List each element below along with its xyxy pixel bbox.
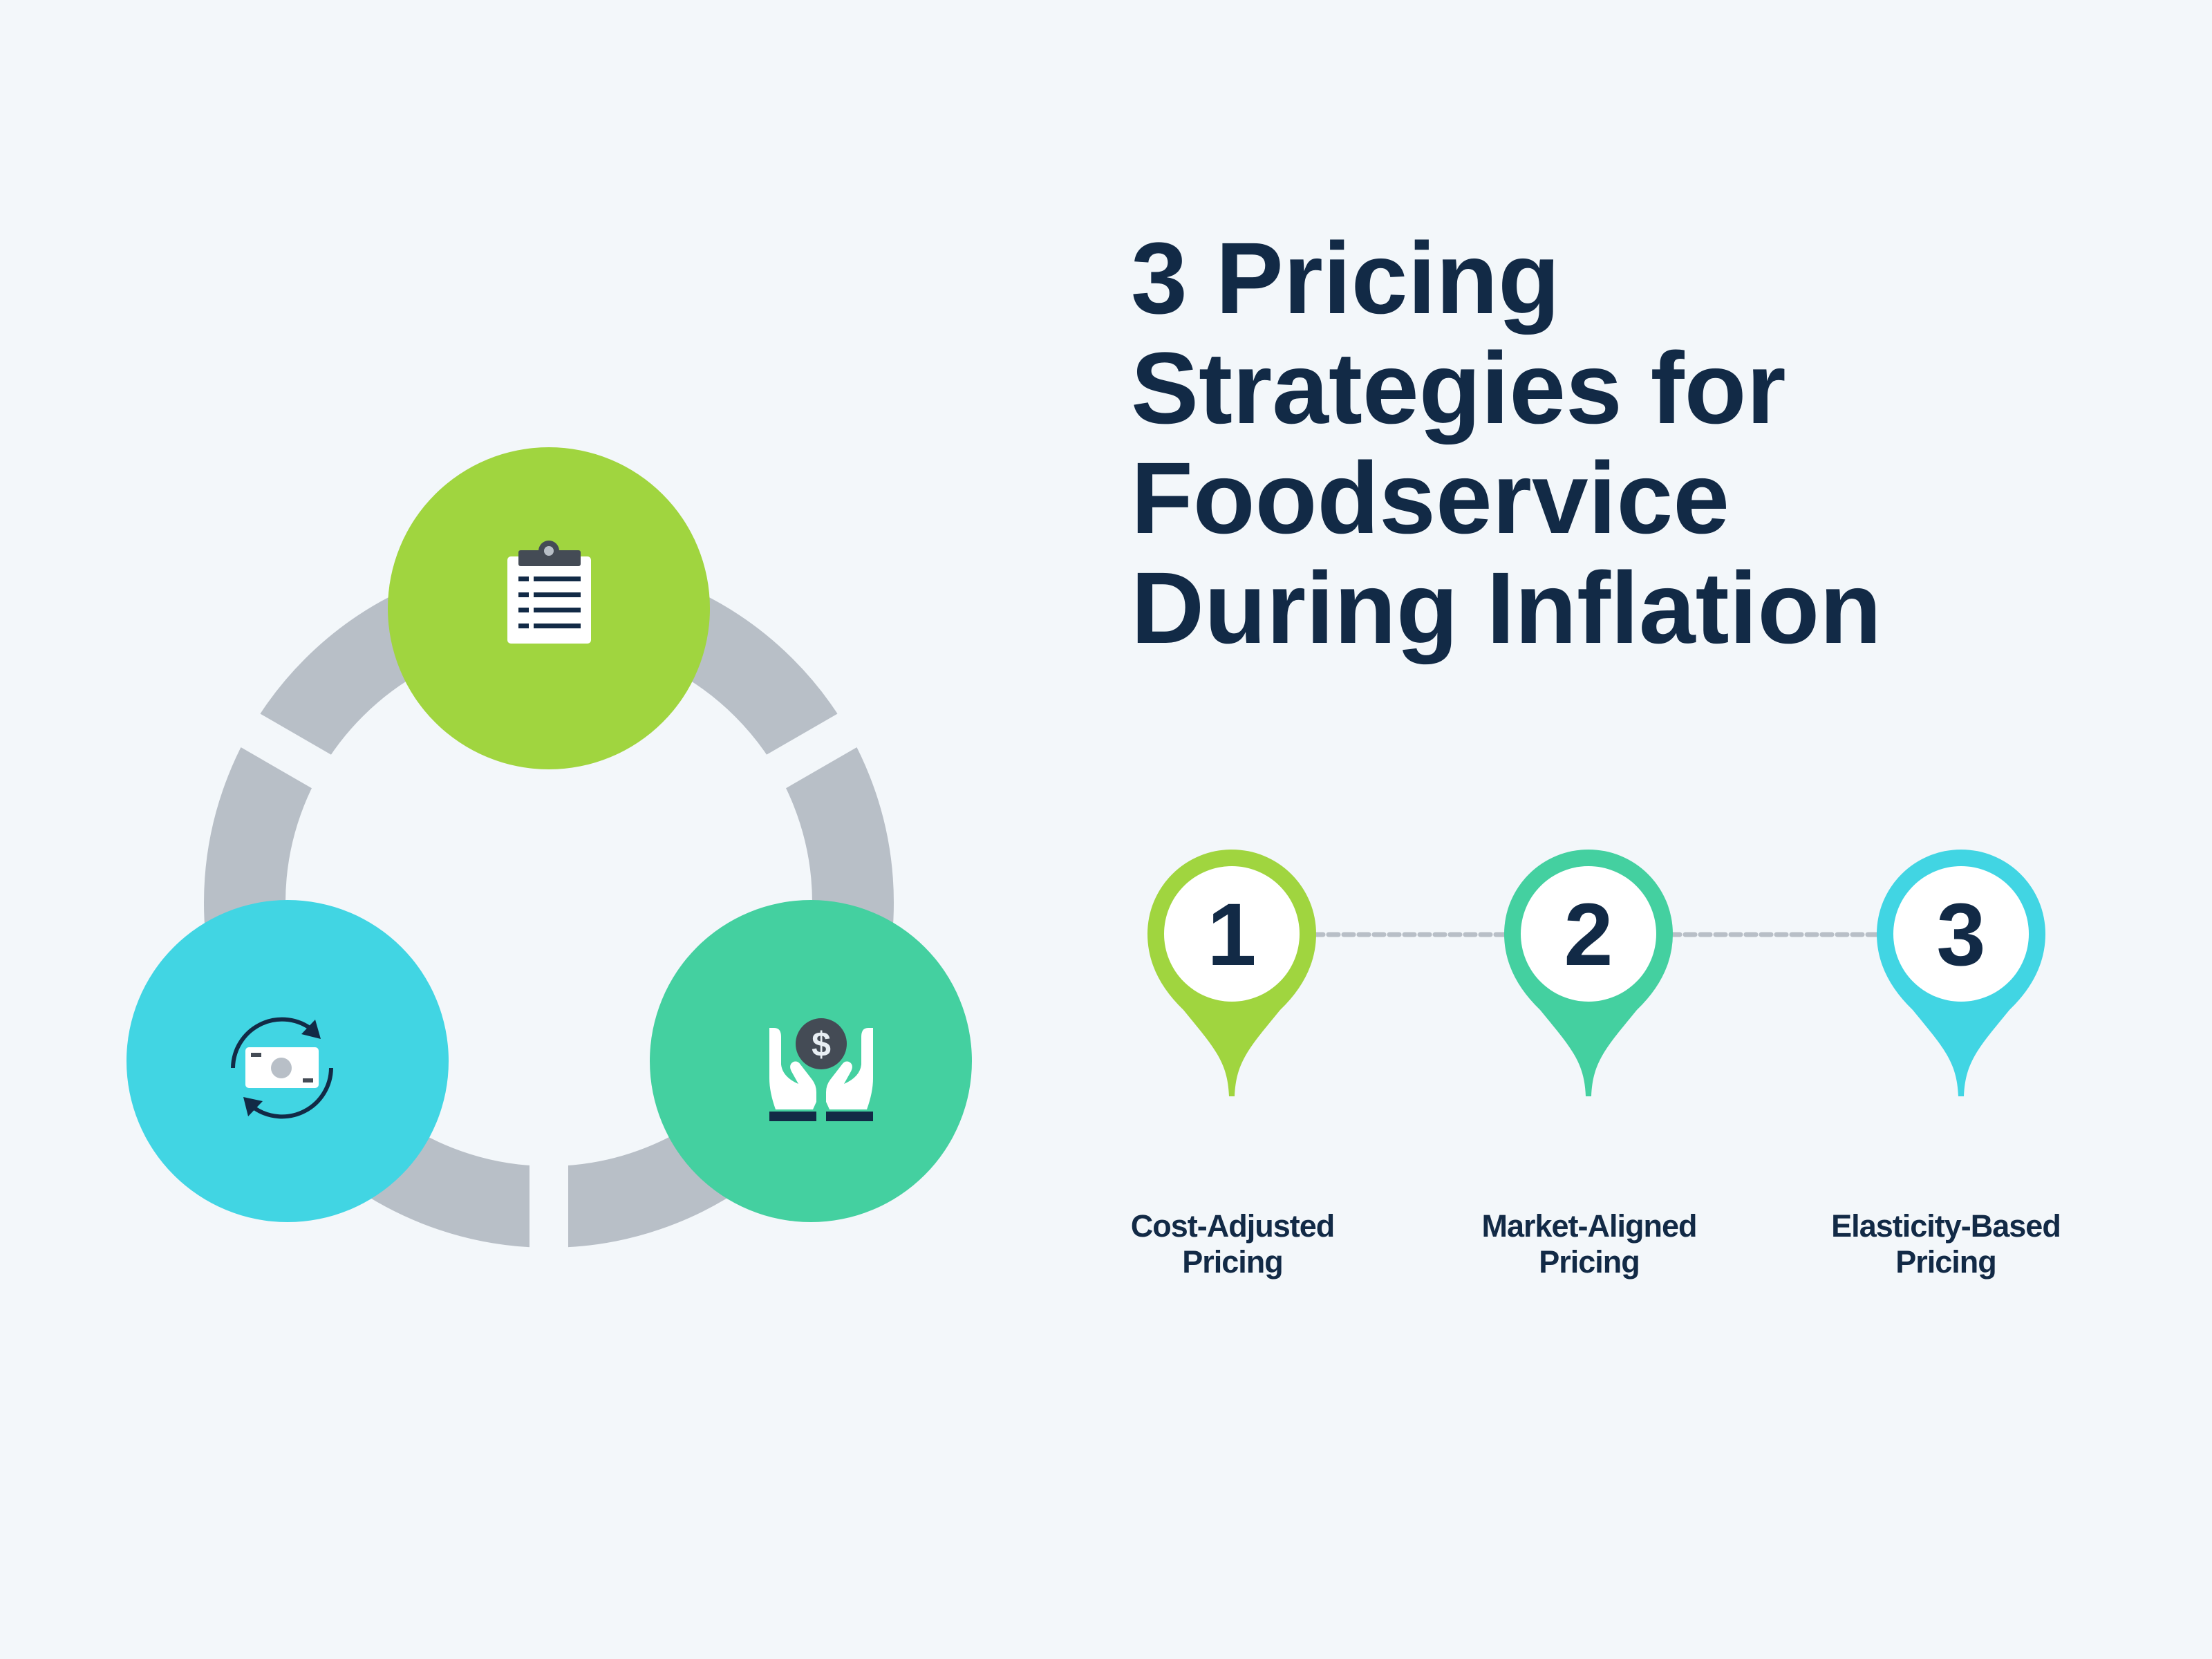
label 2 xyxy=(1481,1208,1697,1280)
label 1: Cost-Adjusted xyxy=(1131,1208,1334,1244)
label 2: Market-Aligned xyxy=(1481,1208,1697,1244)
icon: clipboard xyxy=(507,541,591,644)
pin 1: 1 xyxy=(1207,885,1257,984)
title: During Inflation xyxy=(1131,552,1882,665)
pin 1 xyxy=(1147,850,1316,1096)
title: Foodservice xyxy=(1131,442,1730,555)
dashed connector xyxy=(1313,932,1880,937)
circle: clipboard xyxy=(388,447,710,769)
label 3: Elasticity-Based xyxy=(1831,1208,2061,1244)
title: 3 Pricing xyxy=(1131,222,1560,335)
pin 3 xyxy=(1877,850,2045,1096)
label 2: Pricing xyxy=(1539,1244,1640,1280)
title: Strategies for xyxy=(1131,332,1786,445)
circle: hands with coin xyxy=(650,900,972,1222)
pin 2 xyxy=(1504,850,1673,1096)
icon: cash with arrows xyxy=(233,1020,331,1116)
label 3: Pricing xyxy=(1895,1244,1996,1280)
icon: hands holding coin xyxy=(769,1018,873,1121)
label 1: Pricing xyxy=(1182,1244,1283,1280)
diagram: cycle xyxy=(126,447,972,1247)
pin 2: 2 xyxy=(1564,885,1613,984)
title xyxy=(1131,222,1882,665)
ring xyxy=(223,599,874,1279)
label 1 xyxy=(1131,1208,1334,1280)
icon: hands holding coin: $ xyxy=(812,1025,831,1064)
label 3 xyxy=(1831,1208,2061,1280)
timeline: pins xyxy=(1147,850,2045,1096)
pin 3: 3 xyxy=(1936,885,1986,984)
circle: cash exchange xyxy=(126,900,449,1222)
